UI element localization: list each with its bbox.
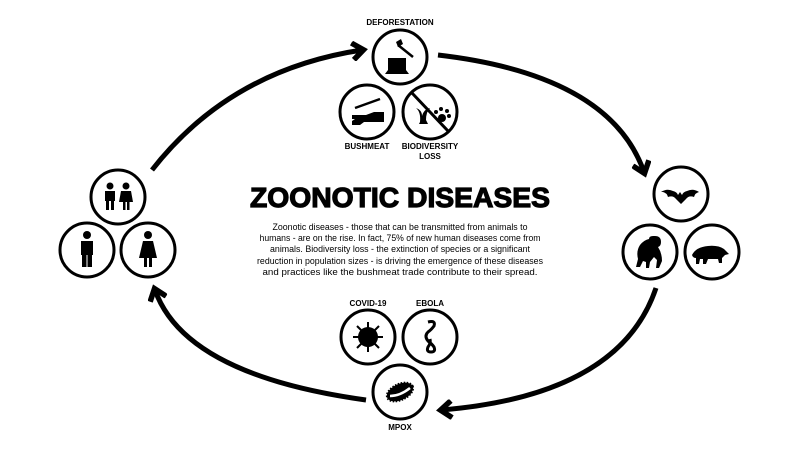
text block: description: Zoonotic diseases - those that can be transmitted from animals to: [272, 222, 528, 233]
icon: children: [91, 170, 145, 224]
icon: bat: [654, 167, 708, 221]
label: biodiversity loss: BIODIVERSITY: [402, 142, 458, 151]
text block: description: animals. Biodiversity loss - the extinction of species or a significant: [270, 244, 530, 255]
icon: bushmeat: [340, 85, 394, 139]
text block: description: [257, 222, 543, 278]
icon: raccoon: [685, 225, 739, 279]
arrow: bottom-left: [155, 290, 366, 400]
text block: description: humans - are on the rise. In fact, 75% of new human diseases come from: [260, 233, 541, 244]
icon: deforestation: [373, 30, 427, 84]
text block: description: and practices like the bushmeat trade contribute to their spread.: [262, 267, 538, 278]
icon: mpox: [373, 365, 427, 419]
label: mpox: MPOX: [388, 423, 412, 432]
icon: chimpanzee: [623, 225, 677, 279]
text block: description: reduction in population sizes - is driving the emergence of these diseases: [257, 256, 543, 267]
icon: woman: [121, 223, 175, 277]
label: ebola: EBOLA: [416, 299, 444, 308]
icon: covid-19: [341, 310, 395, 364]
icon: biodiversity loss: [403, 85, 457, 139]
arrow: top-left: [152, 50, 362, 170]
icon: man: [60, 223, 114, 277]
title: ZOONOTIC DISEASES: [250, 182, 550, 213]
label: bushmeat: BUSHMEAT: [345, 142, 389, 151]
icon: ebola: [403, 310, 457, 364]
label: biodiversity loss: LOSS: [419, 152, 442, 161]
label: covid-19: COVID-19: [350, 299, 387, 308]
arrow: top-right: [438, 55, 644, 172]
arrow: bottom-right: [442, 288, 656, 410]
label: deforestation: DEFORESTATION: [366, 18, 434, 27]
